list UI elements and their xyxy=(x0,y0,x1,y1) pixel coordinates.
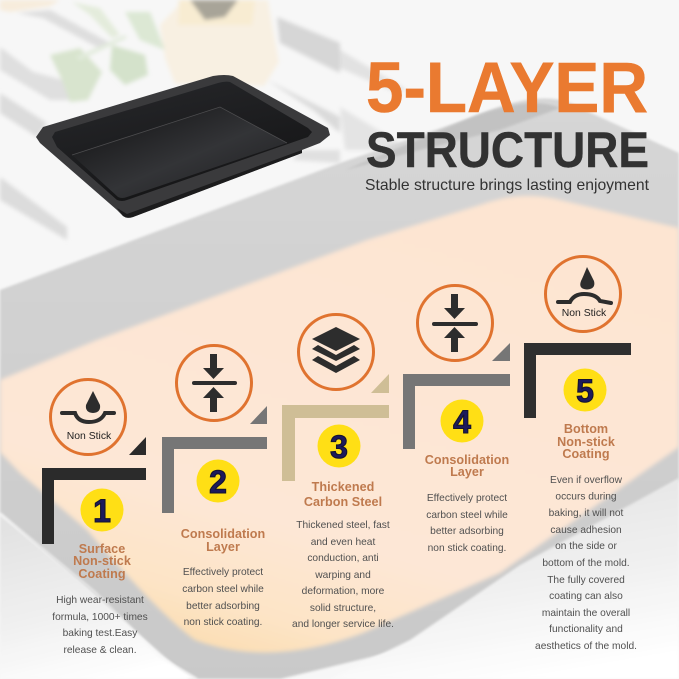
heading: Consolidation xyxy=(181,527,265,541)
number badge 1: 1 xyxy=(93,493,111,529)
heading: Non-stick xyxy=(73,554,132,568)
heading: 5-LAYER: 5-LAYER xyxy=(366,49,648,128)
description: release & clean. xyxy=(63,645,137,656)
cupcake xyxy=(160,0,279,86)
description: baking test.Easy xyxy=(63,628,138,639)
icon: non stick droplet on pan xyxy=(50,380,126,454)
number badge 3 xyxy=(318,424,360,468)
description: and even heat xyxy=(311,537,375,548)
description xyxy=(426,493,508,554)
description: formula, 1000+ times xyxy=(52,612,148,623)
lower tray surface xyxy=(0,515,197,679)
description: functionality and xyxy=(549,624,623,635)
heading: Coating xyxy=(78,567,126,581)
triangle marker xyxy=(250,406,267,424)
number badge 5 xyxy=(564,368,606,412)
description: High wear-resistant xyxy=(56,595,144,606)
heading xyxy=(73,542,132,581)
heading: Consolidation xyxy=(425,453,509,467)
panel: layer 2 consolidation layer xyxy=(162,346,267,628)
icon: non stick droplet on pan: Non Stick xyxy=(67,431,112,442)
panel: layer 5 bottom non-stick coating xyxy=(524,256,637,652)
triangle marker xyxy=(129,437,146,455)
description: non stick coating. xyxy=(428,543,506,554)
leaves xyxy=(50,48,102,102)
corner bracket xyxy=(42,468,146,544)
description xyxy=(182,567,264,628)
description: The fully covered xyxy=(547,575,625,586)
cake surface xyxy=(0,196,679,652)
heading: Non-stick xyxy=(557,435,616,449)
description: maintain the overall xyxy=(542,608,630,619)
description: Thickened steel, fast xyxy=(296,520,390,531)
icon: stacked layers xyxy=(298,314,374,390)
number badge 4 xyxy=(440,400,484,442)
number badge 5: 5 xyxy=(576,373,594,409)
number badge 4: 4 xyxy=(453,404,471,440)
heading: Layer xyxy=(206,540,240,554)
panel: layer 3 thickened carbon steel xyxy=(282,314,394,630)
heading: Bottom xyxy=(564,422,608,436)
number badge 2: 2 xyxy=(209,464,227,500)
heading xyxy=(181,527,265,554)
description: coating can also xyxy=(549,591,623,602)
description: better adsorbing xyxy=(186,601,260,612)
description: carbon steel while xyxy=(182,584,264,595)
subtitle: Stable structure brings lasting enjoyment xyxy=(365,177,650,194)
description xyxy=(52,595,148,656)
title xyxy=(365,49,650,194)
corner bracket xyxy=(282,405,389,481)
triangle marker xyxy=(492,343,510,361)
heading xyxy=(304,480,382,509)
heading: Surface xyxy=(79,542,125,556)
description: cause adhesion xyxy=(550,525,622,536)
panel: layer 1 surface non-stick coating xyxy=(42,380,148,656)
heading: Thickened xyxy=(312,480,374,494)
description: deformation, more xyxy=(302,586,385,597)
description: and longer service life. xyxy=(292,619,394,630)
corner bracket xyxy=(524,343,631,418)
heading: Layer xyxy=(450,465,484,479)
description: aesthetics of the mold. xyxy=(535,641,637,652)
description: Effectively protect xyxy=(427,493,507,504)
description: warping and xyxy=(314,570,371,581)
description: baking, it will not xyxy=(549,508,624,519)
corner bracket xyxy=(162,437,267,513)
description: occurs during xyxy=(555,492,617,502)
icon: compression arrows xyxy=(176,346,252,420)
description: better adsorbing xyxy=(430,526,504,537)
heading xyxy=(425,453,509,479)
icon: non stick droplet over raised pan: Non Stick xyxy=(562,308,607,319)
number badge 2 xyxy=(196,460,240,502)
description: Even if overflow xyxy=(550,475,623,486)
triangle marker xyxy=(371,374,389,393)
description: Effectively protect xyxy=(183,567,263,578)
icon: compression arrows xyxy=(418,286,492,360)
description: carbon steel while xyxy=(426,510,508,521)
number badge 3: 3 xyxy=(330,429,348,465)
corner bracket xyxy=(403,374,510,449)
heading: Coating xyxy=(562,447,610,461)
description: non stick coating. xyxy=(184,617,262,628)
panel: layer 4 consolidation layer xyxy=(403,286,510,554)
icon: non stick droplet over raised pan xyxy=(546,256,620,332)
description xyxy=(292,520,394,630)
heading: Carbon Steel xyxy=(304,495,382,509)
baking pan photo xyxy=(36,75,330,218)
description: solid structure, xyxy=(310,603,376,614)
description: conduction, anti xyxy=(307,553,379,564)
description: bottom of the mold. xyxy=(542,558,630,569)
description: on the side or xyxy=(555,541,617,552)
heading: STRUCTURE: STRUCTURE xyxy=(366,122,649,178)
description xyxy=(535,475,637,652)
heading xyxy=(557,422,616,461)
number badge 1 xyxy=(80,488,124,532)
